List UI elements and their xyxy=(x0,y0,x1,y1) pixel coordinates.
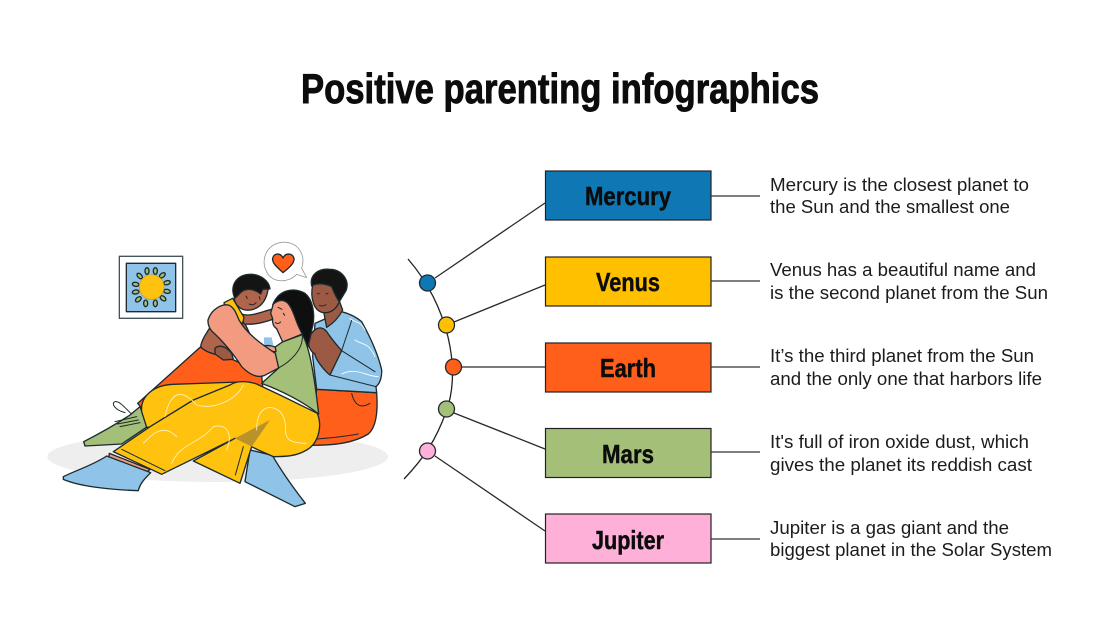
node: Earth xyxy=(446,359,462,375)
row: Earth: and the only one that harbors life xyxy=(770,368,1042,389)
row: Mars: Mars xyxy=(602,439,654,469)
row: Jupiter: biggest planet in the Solar System xyxy=(770,539,1052,560)
row: Mercury: Mercury is the closest planet to xyxy=(770,174,1029,195)
node: Mars xyxy=(438,401,454,417)
node: Venus xyxy=(438,317,454,333)
row: Mercury xyxy=(546,171,1029,220)
title: Positive parenting infographics xyxy=(301,65,819,112)
row: Earth: Earth xyxy=(600,353,656,383)
row: Jupiter xyxy=(546,514,1052,563)
neck and face xyxy=(271,300,302,342)
row: Mars xyxy=(546,428,1032,478)
node: Jupiter xyxy=(420,443,436,459)
yellow trousers xyxy=(142,382,273,427)
row: Venus: is the second planet from the Sun xyxy=(770,282,1048,303)
row: Mercury: Mercury xyxy=(585,181,671,211)
row: Mercury: the Sun and the smallest one xyxy=(770,196,1010,217)
socks and ankle xyxy=(108,453,150,478)
row: Earth: It’s the third planet from the Sun xyxy=(770,345,1034,366)
baby xyxy=(201,274,273,360)
row: Mars: gives the planet its reddish cast xyxy=(770,454,1032,475)
row: Mars: It's full of iron oxide dust, which xyxy=(770,431,1029,452)
row: Venus: Venus xyxy=(596,267,660,297)
node: Mercury xyxy=(420,275,436,291)
arm xyxy=(208,305,279,376)
row: Jupiter: Jupiter is a gas giant and the xyxy=(770,517,1009,538)
icon: framed sun picture xyxy=(119,256,183,318)
illustration: family sitting together xyxy=(47,242,388,507)
woman xyxy=(63,290,320,507)
connectors: nodes to boxes xyxy=(435,203,545,531)
row: Jupiter: Jupiter xyxy=(592,525,664,555)
speech bubble with heart xyxy=(264,242,307,281)
icon: heart xyxy=(273,254,294,273)
floor shadow xyxy=(47,431,388,482)
hair back xyxy=(273,290,314,347)
row: Venus xyxy=(546,257,1048,306)
hand on shoulder xyxy=(258,346,276,352)
man xyxy=(308,269,382,445)
row: Earth xyxy=(546,343,1042,392)
green shirt xyxy=(262,335,319,414)
timeline arc xyxy=(404,259,452,479)
man's raised leg and shoe xyxy=(84,347,263,446)
row: Venus: Venus has a beautiful name and xyxy=(770,259,1036,280)
